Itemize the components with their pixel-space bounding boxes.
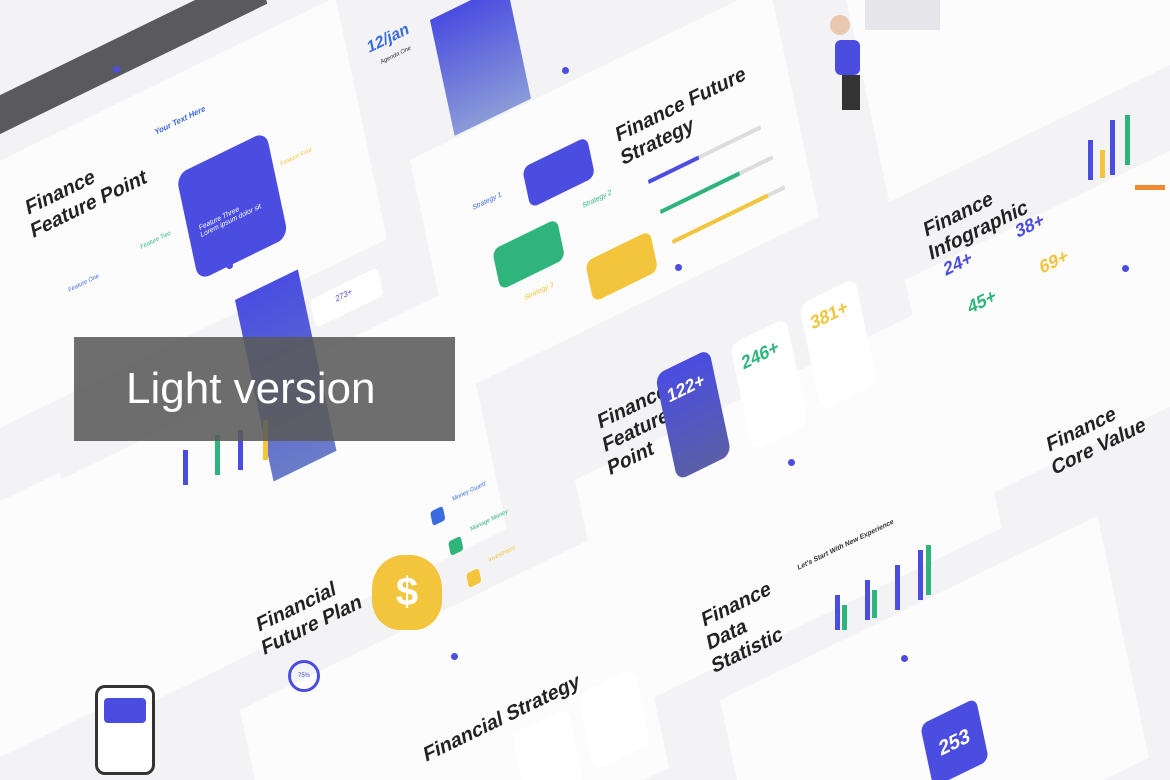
title: Finance Feature Point (center): Finance: [596, 379, 669, 434]
card: Feature Three blue: [176, 131, 288, 281]
card 246+: [730, 318, 808, 451]
bar chart: data statistic: [835, 545, 931, 630]
title: Financial Strategy: Financial Strategy: [422, 669, 582, 767]
text: 273+: [335, 287, 353, 304]
photo card with stats 273+: [235, 269, 336, 481]
title: Finance Feature Point (center): Feature: [601, 404, 671, 457]
card 381+: 381+: [809, 296, 849, 334]
progress bars: [648, 125, 785, 244]
text: Manage Money: [470, 509, 508, 533]
title: Finance Infographic: Infographic: [927, 195, 1030, 265]
title: Finance Data Statistic: [700, 577, 785, 679]
text: Feature Four: [280, 147, 312, 168]
card 122+: [655, 349, 731, 481]
title: Finance Feature Point (left): Feature Point: [29, 165, 149, 243]
list: money items: [430, 480, 516, 588]
card: Feature Three blue: Feature Three: [199, 206, 240, 232]
chart top right: [1088, 115, 1165, 190]
text: Investment: [488, 545, 516, 564]
title: Finance Core Value: Core Value: [1050, 413, 1148, 480]
overlay: Light version: [74, 337, 455, 441]
title: Finance Data Statistic: Finance: [700, 577, 773, 632]
title: Finance Feature Point (center): Point: [606, 436, 656, 481]
card 253: 253: [937, 724, 972, 761]
strategy cards bottom: [512, 708, 584, 780]
text: Agenda One: [380, 45, 412, 66]
dark photo strip top-left: [0, 0, 267, 135]
donut 75%: 75%: [298, 673, 310, 679]
title: Finance Data Statistic: Statistic: [710, 622, 785, 679]
icon: money bag: [372, 555, 442, 630]
title: Finance Data Statistic: Data: [705, 614, 749, 655]
stats: [942, 209, 1070, 318]
bar chart: build process: [183, 420, 268, 485]
title: Financial Future Plan: Future Plan: [260, 590, 364, 660]
whiteboard: [865, 0, 940, 30]
text: Money Guard: [452, 481, 486, 503]
donut 75%: [288, 660, 320, 692]
card: Feature Three blue: Lorem ipsum dolor sit: [200, 203, 262, 239]
text: 38+: [1014, 209, 1046, 242]
blue building photo: [430, 0, 531, 136]
text: Your Text Here: Your Text Here: [154, 104, 206, 137]
text: Let's Start With New Experience: [797, 518, 894, 572]
overlay: Light version: Light version: [126, 364, 375, 413]
title: Finance Future Strategy: Strategy: [619, 113, 696, 170]
text: feature labels: Feature One: [68, 273, 100, 294]
title: Finance Future Strategy: Finance Future: [614, 62, 748, 147]
text: Strategy 1: [472, 191, 502, 212]
phone illustration: [95, 685, 155, 775]
card 122+: 122+: [665, 369, 706, 407]
text: Feature Two: [140, 230, 171, 251]
text: Strategy 3: [524, 281, 554, 302]
illustration: woman presenter: [830, 15, 860, 110]
title: Finance Core Value: Finance: [1045, 402, 1118, 457]
text: 12/jan: 12/jan: [366, 20, 410, 57]
card 246+: 246+: [740, 336, 780, 374]
title: Finance Infographic: Finance: [922, 187, 995, 242]
card 253: [920, 698, 989, 780]
text: 24+: [942, 247, 974, 280]
text: 69+: [1038, 245, 1070, 278]
title: Financial Future Plan: Financial: [255, 577, 338, 637]
pagination dots: [113, 66, 1129, 662]
card 381+: [799, 278, 877, 411]
strategy boxes: [472, 139, 657, 302]
title: Finance Feature Point (center): [596, 379, 671, 481]
title: Finance Feature Point (left): Finance: [24, 165, 97, 220]
icon: money bag: $: [396, 570, 418, 614]
text: Strategy 2: [582, 189, 612, 210]
text: 45+: [966, 285, 998, 318]
